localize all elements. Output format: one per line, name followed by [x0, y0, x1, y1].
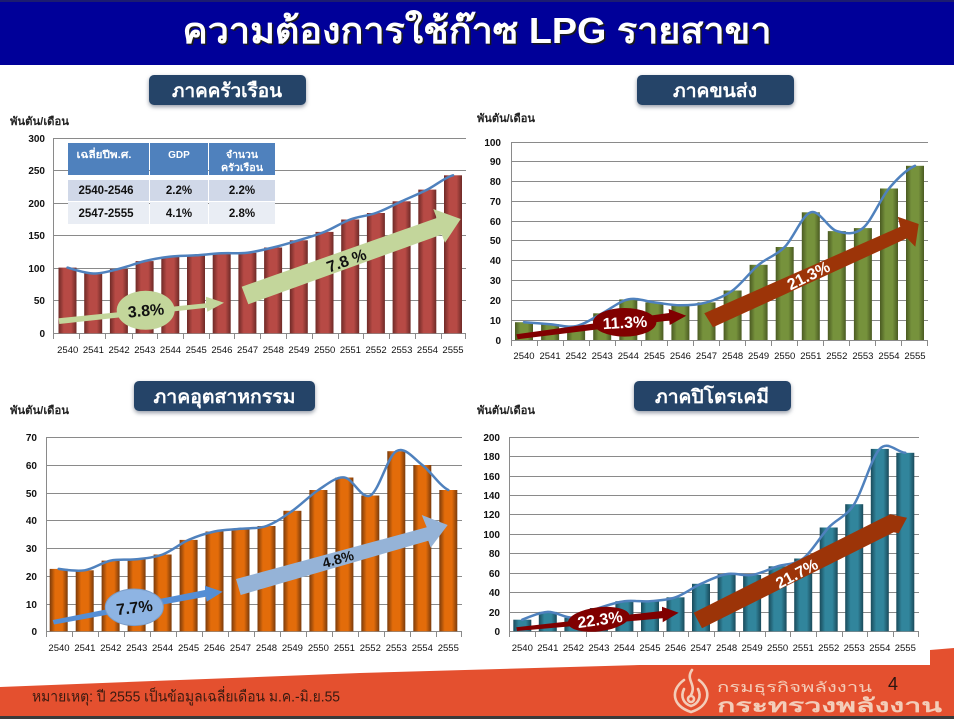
- heading: petrochemical: [634, 381, 791, 411]
- chart: transport bars: 2545: [644, 351, 665, 362]
- ministry name: กรมธุรกิจพลังงาน: [717, 679, 873, 696]
- chart: petrochemical bars: 2550: [767, 643, 788, 654]
- chart: petrochemical bars: 160: [483, 472, 500, 483]
- heading: industry: [134, 381, 315, 411]
- chart: industry bars: 2552: [360, 643, 381, 654]
- chart: household bars: 250: [28, 166, 45, 177]
- table: GDP and household growth: GDP: [168, 150, 190, 161]
- chart: petrochemical bars: 2555: [895, 643, 916, 654]
- chart: transport bars: 2551: [800, 351, 821, 362]
- chart: petrochemical bars: 140: [483, 491, 500, 502]
- chart: transport bars: 10: [490, 316, 501, 327]
- chart: household bars: 150: [28, 231, 45, 242]
- arrow: 7.8% growth: 7.8 %: [325, 246, 369, 276]
- chart: household bars: 2544: [160, 345, 181, 356]
- chart: transport bars: 80: [490, 177, 501, 188]
- chart: transport bars: 2555: [904, 351, 926, 362]
- chart: industry bars: 2550: [308, 643, 329, 654]
- unit label: พันตัน/เดือน: [10, 115, 69, 128]
- chart: petrochemical bars: 2553: [844, 643, 865, 654]
- chart: petrochemical bars: 2544: [614, 643, 635, 654]
- unit label: พันตัน/เดือน: [10, 404, 69, 417]
- chart: petrochemical bars: 120: [483, 510, 500, 521]
- chart: industry bars: 2541: [74, 643, 95, 654]
- chart: household bars: 0: [39, 329, 45, 340]
- arrow: 7.7% growth: 7.7%: [115, 598, 154, 619]
- arrow: 7.7% growth: [53, 586, 223, 626]
- heading: transport: ภาคขนส่ง: [673, 81, 757, 102]
- table: GDP and household growth: 2.8%: [229, 208, 255, 220]
- table: GDP and household growth: 2.2%: [229, 185, 255, 197]
- table: GDP and household growth: 2.2%: [166, 185, 192, 197]
- table: GDP and household growth: [68, 143, 275, 224]
- chart: petrochemical bars: 80: [489, 549, 500, 560]
- heading: household: ภาคครัวเรือน: [172, 80, 282, 102]
- chart: industry bars: 2542: [100, 643, 121, 654]
- chart: transport bars: 2548: [722, 351, 743, 362]
- heading: industry: ภาคอุตสาหกรรม: [154, 387, 296, 409]
- chart: industry bars: 2555: [438, 643, 459, 654]
- arrow: 4.8% growth: 4.8%: [320, 547, 356, 571]
- chart: transport bars: 2540: [513, 351, 535, 362]
- panel: household sector: [10, 75, 466, 356]
- chart: petrochemical bars: [483, 433, 919, 654]
- chart: household bars: 2549: [288, 345, 310, 356]
- chart: petrochemical bars: 2540: [512, 643, 533, 654]
- chart: petrochemical bars: 200: [483, 433, 500, 444]
- chart: petrochemical bars: 60: [489, 569, 500, 580]
- arrow: 11.3% growth: 11.3%: [602, 314, 648, 333]
- arrow: 11.3% growth: [516, 308, 686, 339]
- arrow: 7.8% growth: [242, 209, 461, 304]
- chart: petrochemical bars: 2542: [563, 643, 584, 654]
- chart: household bars: 2553: [391, 345, 412, 356]
- chart: industry bars: 2553: [386, 643, 407, 654]
- table: GDP and household growth: เฉลี่ยปีพ.ศ.: [76, 147, 132, 161]
- arrow: 4.8% growth: [236, 515, 448, 595]
- chart: petrochemical bars: 40: [489, 588, 500, 599]
- chart: petrochemical bars: 2547: [690, 643, 712, 654]
- chart: household bars: 2542: [109, 345, 130, 356]
- arrow: 21.7% growth: 21.7%: [773, 556, 821, 593]
- chart: petrochemical bars: 2543: [588, 643, 609, 654]
- icon: ministry flame logo: [675, 670, 707, 712]
- chart: industry bars: 40: [26, 516, 37, 527]
- chart: household bars: 2540: [57, 345, 78, 356]
- chart: petrochemical bars: 2552: [818, 643, 839, 654]
- chart: household bars: 2548: [263, 345, 284, 356]
- chart: transport bars: 20: [490, 296, 501, 307]
- header band: [0, 0, 954, 65]
- chart: industry bars: 2545: [178, 643, 199, 654]
- chart: transport bars: 90: [490, 157, 501, 168]
- chart: industry bars: [26, 433, 462, 654]
- chart: transport bars: 40: [490, 256, 501, 267]
- chart: transport bars: 2547: [696, 351, 717, 362]
- chart: transport bars: 50: [490, 236, 501, 247]
- chart: industry bars: 70: [26, 433, 37, 444]
- arrow: 21.3% growth: 21.3%: [785, 259, 833, 294]
- chart: household bars: 2547: [237, 345, 258, 356]
- heading: petrochemical: ภาคปิโตรเคมี: [655, 385, 769, 408]
- table: GDP and household growth: ครัวเรือน: [221, 162, 263, 174]
- chart: household bars: 2551: [340, 345, 361, 356]
- chart: industry bars: 2551: [334, 643, 355, 654]
- chart: household bars: 2554: [417, 345, 438, 356]
- chart: household bars: 2543: [134, 345, 155, 356]
- chart: transport bars: 100: [484, 138, 501, 149]
- chart: industry bars: 0: [31, 627, 37, 638]
- chart: household bars: 200: [28, 199, 45, 210]
- chart: household bars: 2555: [442, 345, 464, 356]
- table: GDP and household growth: จำนวน: [226, 149, 258, 161]
- table: GDP and household growth: 2547-2555: [78, 208, 134, 220]
- chart: transport bars: 2541: [540, 351, 561, 362]
- chart: transport bars: 2552: [826, 351, 847, 362]
- arrow: 3.8% growth: 3.8%: [127, 301, 165, 322]
- unit label: พันตัน/เดือน: [477, 404, 535, 417]
- chart: household bars: 50: [34, 296, 45, 307]
- arrow: 3.8% growth: [59, 291, 224, 330]
- chart: petrochemical bars: 2548: [716, 643, 737, 654]
- chart: petrochemical bars: 2546: [665, 643, 686, 654]
- chart: petrochemical bars: 180: [483, 452, 500, 463]
- chart: transport bars: 60: [490, 217, 501, 228]
- chart: industry bars: 2548: [256, 643, 277, 654]
- chart: industry bars: 50: [26, 489, 37, 500]
- chart: household bars: 2552: [366, 345, 387, 356]
- footer band: [0, 648, 954, 719]
- chart: petrochemical bars: 2549: [742, 643, 763, 654]
- chart: petrochemical bars: 20: [489, 608, 500, 619]
- arrow: 21.7% growth: [694, 514, 907, 628]
- chart: transport bars: 2554: [878, 351, 900, 362]
- panel: industry sector: [10, 381, 462, 654]
- chart: industry bars: 2547: [230, 643, 251, 654]
- title: ความต้องการใช้ก๊าซ LPG รายสาขา: [184, 10, 773, 52]
- heading: household: [149, 75, 306, 105]
- chart: industry bars: 30: [26, 544, 37, 555]
- chart: petrochemical bars: 0: [494, 627, 500, 638]
- heading: transport: [637, 75, 794, 105]
- chart: transport bars: 2543: [592, 351, 613, 362]
- chart: petrochemical bars: 2541: [537, 643, 558, 654]
- chart: industry bars: 10: [26, 600, 37, 611]
- chart: industry bars: 2544: [152, 643, 173, 654]
- footnote: หมายเหตุ: ปี 2555 เป็นข้อมูลเฉลี่ยเดือน ม.ค.-มิ.ย.55: [32, 686, 340, 706]
- chart: transport bars: 2542: [566, 351, 587, 362]
- chart: transport bars: 2553: [852, 351, 873, 362]
- ministry name: กระทรวงพลังงาน: [717, 696, 942, 717]
- chart: household bars: 100: [28, 264, 45, 275]
- chart: transport bars: 2550: [774, 351, 795, 362]
- table: GDP and household growth: 4.1%: [166, 208, 192, 220]
- chart: petrochemical bars: 100: [483, 530, 500, 541]
- chart: household bars: 300: [28, 134, 45, 145]
- unit label: พันตัน/เดือน: [477, 112, 535, 125]
- arrow: 21.3% growth: [704, 217, 919, 327]
- chart: household bars: 2550: [314, 345, 335, 356]
- chart: industry bars: 60: [26, 461, 37, 472]
- chart: industry bars: 20: [26, 572, 37, 583]
- chart: household bars: 2546: [211, 345, 232, 356]
- chart: household bars: [28, 134, 466, 356]
- table: GDP and household growth: 2540-2546: [78, 185, 134, 197]
- chart: transport bars: 2549: [748, 351, 769, 362]
- arrow: 22.3% growth: 22.3%: [576, 609, 624, 632]
- chart: transport bars: 2546: [670, 351, 691, 362]
- chart: industry bars: 2540: [48, 643, 70, 654]
- page number: 4: [888, 674, 898, 694]
- chart: household bars: 2541: [83, 345, 104, 356]
- chart: transport bars: 2544: [618, 351, 639, 362]
- chart: household bars: 2545: [186, 345, 207, 356]
- chart: transport bars: 30: [490, 276, 501, 287]
- chart: petrochemical bars: 2551: [793, 643, 814, 654]
- chart: industry bars: 2554: [412, 643, 433, 654]
- panel: petrochemical sector: [477, 381, 919, 654]
- chart: industry bars: 2546: [204, 643, 225, 654]
- chart: transport bars: 70: [490, 197, 501, 208]
- chart: transport bars: [484, 138, 928, 362]
- panel: transport sector: [477, 75, 928, 362]
- chart: transport bars: 0: [495, 336, 501, 347]
- chart: industry bars: 2549: [282, 643, 303, 654]
- chart: petrochemical bars: 2554: [869, 643, 890, 654]
- chart: petrochemical bars: 2545: [639, 643, 661, 654]
- arrow: 22.3% growth: [516, 604, 679, 635]
- ministry name: [717, 679, 942, 717]
- title: ความต้องการใช้ก๊าซ LPG รายสาขา: [182, 9, 772, 51]
- chart: industry bars: 2543: [126, 643, 147, 654]
